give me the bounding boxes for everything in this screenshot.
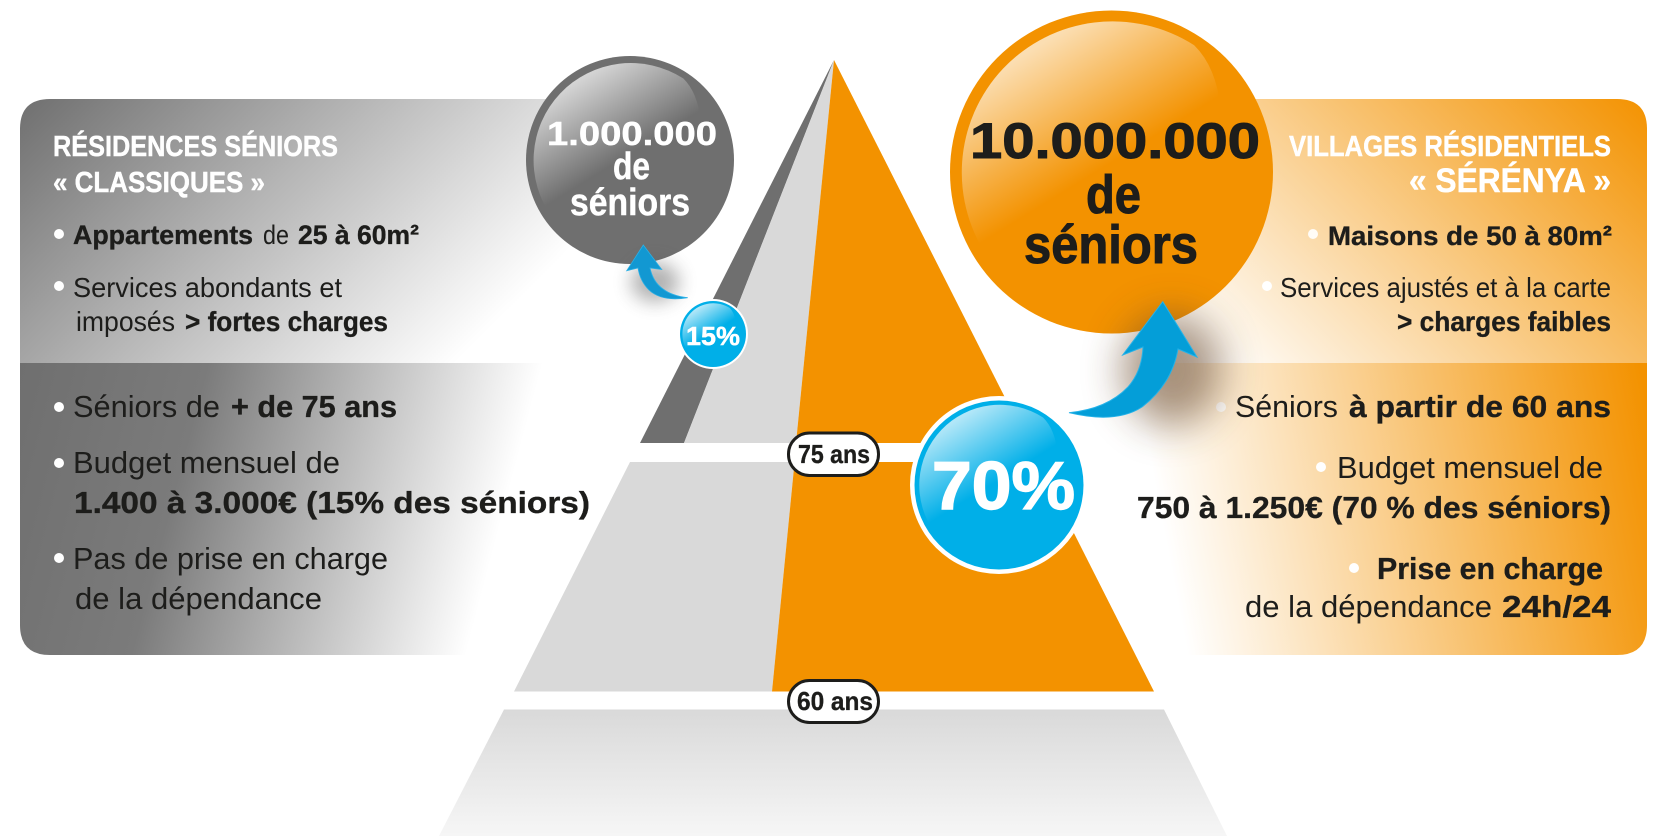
circle: 1.000.000 de séniors: séniors — [570, 182, 690, 224]
pyramid top tier: orange — [796, 60, 1028, 443]
arrow: 70% to 10.000.000 — [1069, 302, 1197, 417]
bullet: budget mensuel: Budget mensuel de — [1337, 450, 1603, 485]
panel: résidences séniors classiques — [20, 99, 630, 655]
bullet: appartements: de — [263, 220, 289, 250]
bullet: âge séniors: Séniors de — [73, 389, 220, 424]
age label: 75 ans — [788, 433, 878, 476]
heading: sérénya: « SÉRÉNYA » — [1409, 162, 1611, 200]
bullet: prise en charge: Prise en charge — [1377, 551, 1603, 586]
bullet: dépendance — [54, 541, 388, 616]
badge: 15%: 15% — [686, 321, 740, 351]
bullet: budget mensuel — [1137, 450, 1611, 525]
circle: 10.000.000 de séniors: séniors — [1024, 215, 1198, 275]
bullet: âge séniors: + de 75 ans — [231, 389, 397, 424]
panel background: upper right — [1111, 99, 1647, 363]
heading: villages résidentiels: VILLAGES RÉSIDENTIELS — [1289, 129, 1611, 163]
pyramid top tier: light grey — [684, 60, 834, 443]
circle: 1.000.000 de séniors — [526, 56, 734, 264]
pyramid chart — [439, 60, 1227, 836]
circle: 1.000.000 de séniors: 1.000.000 — [547, 115, 717, 152]
pyramid middle tier: orange — [772, 462, 1154, 692]
heading: classiques: « CLASSIQUES » — [53, 167, 265, 199]
age label: 60 ans: 60 ans — [797, 686, 873, 716]
pyramid middle tier: grey — [514, 462, 795, 692]
bullet: budget mensuel: Budget mensuel de — [73, 445, 340, 480]
badge: 15% — [678, 299, 748, 369]
badge: 70%: 70% — [932, 448, 1075, 524]
pyramid top tier: dark wedge — [640, 60, 834, 443]
bullet: services abondants: > fortes charges — [185, 306, 388, 337]
bullet: appartements: Appartements — [73, 220, 253, 250]
bullet: budget mensuel: 750 à 1.250€ (70 % des séniors) — [1137, 490, 1611, 525]
bullet: services abondants: Services abondants et — [73, 272, 342, 303]
bullet: appartements: 25 à 60m² — [298, 220, 419, 250]
bullet: services ajustés — [1262, 272, 1611, 337]
bullet: prise en charge: 24h/24 — [1502, 589, 1612, 624]
bullet: âge séniors: à partir de 60 ans — [1349, 389, 1611, 424]
heading: résidences séniors: RÉSIDENCES SÉNIORS — [53, 129, 338, 163]
bullet: appartements — [54, 220, 419, 250]
bullet: services abondants: imposés — [76, 306, 175, 337]
bullet: âge séniors: Séniors — [1235, 389, 1338, 424]
bullet: budget mensuel — [54, 445, 590, 520]
badge: 70% — [910, 396, 1088, 574]
bullet: services abondants — [54, 272, 388, 337]
bullet: dépendance: Pas de prise en charge — [73, 541, 388, 576]
shadow: small arrow — [631, 262, 679, 302]
circle: 10.000.000 de séniors — [950, 10, 1273, 334]
bullet: prise en charge: de la dépendance — [1245, 589, 1492, 624]
arrow: 15% to 1.000.000 — [627, 245, 688, 299]
age label: 60 ans — [788, 680, 878, 722]
circle: 1.000.000 de séniors: de — [613, 146, 650, 188]
shadow: large arrow — [1122, 314, 1222, 426]
bullet: services ajustés: Services ajustés et à la carte — [1280, 272, 1611, 303]
panel: villages résidentiels sérénya — [1040, 99, 1647, 655]
circle: 10.000.000 de séniors: 10.000.000 — [970, 113, 1260, 169]
bullet: dépendance: de la dépendance — [75, 581, 322, 616]
bullet: âge séniors — [1216, 389, 1611, 424]
bullet: âge séniors — [54, 389, 397, 424]
panel background: lower right — [1040, 363, 1647, 655]
bullet: services ajustés: > charges faibles — [1397, 306, 1611, 337]
bullet: maisons: Maisons de 50 à 80m² — [1328, 221, 1612, 251]
panel background: upper left — [20, 99, 630, 363]
bullet: prise en charge — [1245, 551, 1612, 624]
circle: 10.000.000 de séniors: de — [1086, 165, 1141, 225]
panel background: lower left — [20, 363, 600, 655]
bullet: budget mensuel: 1.400 à 3.000€ (15% des séniors) — [74, 485, 590, 520]
pyramid base tier — [439, 710, 1227, 836]
age label: 75 ans: 75 ans — [798, 439, 870, 469]
